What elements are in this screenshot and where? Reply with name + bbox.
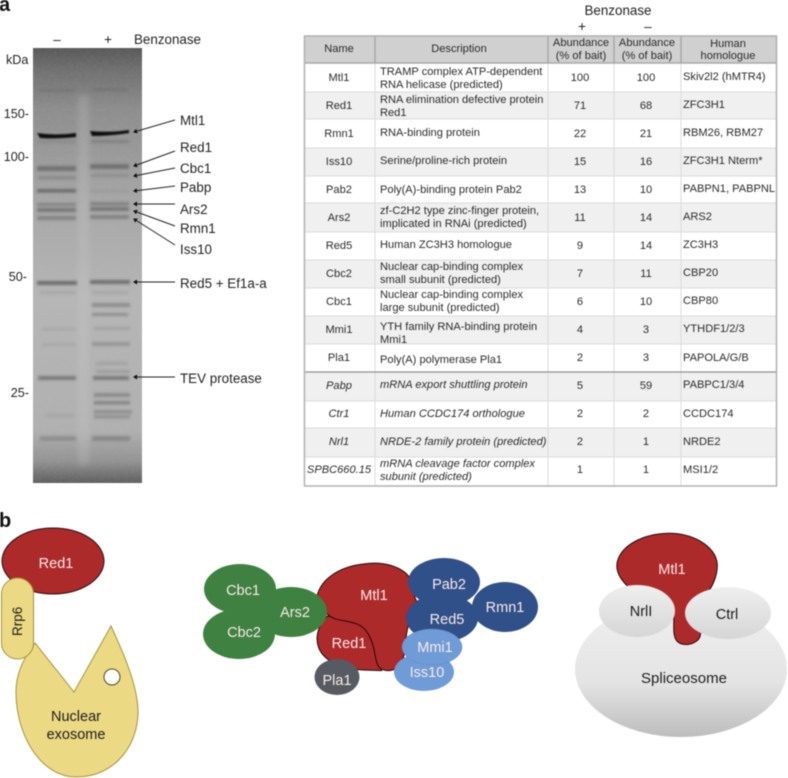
table super-header: + xyxy=(578,19,586,34)
table header row: (% of bait) xyxy=(556,50,606,62)
table body rows: Pab2 xyxy=(326,184,352,196)
table body rows: 22 xyxy=(574,128,586,140)
molecular weight markers xyxy=(4,53,29,400)
table body rows: Red5 xyxy=(326,240,352,252)
labels: NrlI xyxy=(630,604,652,620)
table body rows: PABPN1, PABPNL xyxy=(683,183,775,195)
Red1 subunit shape xyxy=(317,616,382,671)
subunit labels xyxy=(226,577,524,689)
band labels: Rmn1 xyxy=(180,221,216,236)
table body rows: 3 xyxy=(643,324,649,336)
table body rows: MSI1/2 xyxy=(683,464,718,476)
table body rows: SPBC660.15 xyxy=(307,464,372,476)
table body rows: RBM26, RBM27 xyxy=(683,127,763,139)
table body rows: Human ZC3H3 homologue xyxy=(380,239,512,251)
table body rows: Mmi1 xyxy=(380,334,407,346)
gel image xyxy=(33,48,142,483)
table body rows: YTH family RNA-binding protein xyxy=(380,321,537,333)
lane headers: + xyxy=(104,32,112,47)
panel: abundance table xyxy=(304,36,776,486)
table body rows: Pla1 xyxy=(328,352,350,364)
table body rows: 14 xyxy=(640,240,652,252)
table body rows: Ars2 xyxy=(328,212,350,224)
table body rows: 10 xyxy=(640,296,652,308)
subunit labels: Red1 xyxy=(332,636,366,652)
table body rows: Mtl1 xyxy=(329,72,349,84)
molecular weight markers: 150- xyxy=(4,107,29,121)
table body rows: 4 xyxy=(577,324,583,336)
lane headers: – xyxy=(53,32,61,47)
table body rows: mRNA export shuttling protein xyxy=(380,379,528,391)
table body rows: NRDE-2 family protein (predicted) xyxy=(380,436,547,448)
table body rows: 1 xyxy=(577,464,583,476)
subunit labels: Mmi1 xyxy=(417,640,453,656)
table body rows: CBP20 xyxy=(683,267,718,279)
band labels: Cbc1 xyxy=(180,161,211,176)
band labels: Ars2 xyxy=(180,202,208,217)
green subunits xyxy=(203,564,327,659)
table header row: (% of bait) xyxy=(622,50,672,62)
band arrows xyxy=(134,120,175,377)
table body rows: CBP80 xyxy=(683,295,718,307)
table body rows: CCDC174 xyxy=(683,408,734,420)
band labels: Iss10 xyxy=(180,242,212,257)
table super-header: Benzonase xyxy=(584,3,652,18)
band labels: Pabp xyxy=(180,180,211,195)
labels xyxy=(630,562,738,687)
table body rows: 9 xyxy=(577,240,583,252)
table header row: Name xyxy=(324,43,354,55)
spliceosome oval xyxy=(575,601,787,737)
table body rows: Cbc2 xyxy=(326,268,352,280)
band labels: Mtl1 xyxy=(180,113,205,128)
subunit labels: Rmn1 xyxy=(486,600,524,616)
subunit labels: Red5 xyxy=(430,612,464,628)
table header row: homologue xyxy=(701,50,755,62)
subunit labels: Cbc1 xyxy=(226,583,260,599)
table body rows: 3 xyxy=(643,352,649,364)
diagram: Mtl1 with spliceosome xyxy=(575,533,787,737)
table outer border xyxy=(304,36,776,486)
table body rows: 100 xyxy=(637,72,655,84)
table body rows: 1 xyxy=(643,464,649,476)
table super-header xyxy=(578,3,652,34)
table body rows: 1 xyxy=(643,436,649,448)
table body rows: Red1 xyxy=(380,107,407,119)
table body rows: 68 xyxy=(640,100,652,112)
table body rows: Rmn1 xyxy=(324,128,354,140)
table body rows: 5 xyxy=(577,380,583,392)
diagram: Red1 and nuclear exosome xyxy=(2,528,138,777)
labels: Ctrl xyxy=(716,607,738,623)
subunit labels: Mtl1 xyxy=(360,588,388,604)
diagram: MTREC complex xyxy=(203,558,538,695)
Red1 label: Red1 xyxy=(39,556,73,572)
table body rows: Cbc1 xyxy=(326,296,352,308)
table header row: Human xyxy=(710,38,746,50)
table body rows: Red1 xyxy=(326,100,352,112)
labels: Spliceosome xyxy=(641,670,727,687)
table body rows: Nrl1 xyxy=(329,436,349,448)
table body rows: 59 xyxy=(640,380,652,392)
table body rows: mRNA cleavage factor complex xyxy=(380,458,535,470)
table header row: Abundance xyxy=(619,37,675,49)
table body rows: 2 xyxy=(577,436,583,448)
band labels xyxy=(180,113,267,386)
Mtl1 subunit shape xyxy=(317,563,417,671)
table body rows: RNA-binding protein xyxy=(380,127,480,139)
Red1 oval xyxy=(2,528,104,594)
table body rows: Pabp xyxy=(326,380,352,392)
table body rows: NRDE2 xyxy=(683,436,721,448)
table body rows: subunit (predicted) xyxy=(380,471,472,483)
table header row: Description xyxy=(431,43,487,55)
molecular weight markers: 100- xyxy=(4,150,29,164)
Nrl1 oval xyxy=(599,585,675,637)
table body rows: YTHDF1/2/3 xyxy=(683,323,745,335)
table body rows: 100 xyxy=(571,72,589,84)
panel: gel with annotations xyxy=(4,32,267,483)
labels: Mtl1 xyxy=(658,562,686,578)
subunit labels: Ars2 xyxy=(280,605,310,621)
Ctr1 oval xyxy=(685,587,771,639)
nuclear exosome shape xyxy=(16,626,138,777)
table body rows: Iss10 xyxy=(326,156,352,168)
table body rows: RNA elimination defective protein xyxy=(380,94,543,106)
table background and grid xyxy=(304,36,776,486)
table body rows: 6 xyxy=(577,296,583,308)
table body rows: zf-C2H2 type zinc-finger protein, xyxy=(380,205,539,217)
molecular weight markers: 25- xyxy=(11,386,29,400)
subunit labels: Pab2 xyxy=(432,577,466,593)
table body rows: Ctr1 xyxy=(329,408,349,420)
band labels: Red1 xyxy=(180,140,212,155)
Rrp6 label: Rrp6 xyxy=(10,607,25,636)
active site hole xyxy=(104,669,120,685)
table header row: Abundance xyxy=(553,37,609,49)
subunit labels: Iss10 xyxy=(410,665,444,681)
exosome label: exosome xyxy=(47,727,105,743)
table body rows: 16 xyxy=(640,156,652,168)
table body rows: 15 xyxy=(574,156,586,168)
table body rows: large subunit (predicted) xyxy=(380,302,500,314)
table body rows: 10 xyxy=(640,184,652,196)
molecular weight markers: kDa xyxy=(6,53,28,67)
exosome label: Nuclear xyxy=(51,709,101,725)
table super-header: – xyxy=(644,19,652,34)
table body rows: 13 xyxy=(574,184,586,196)
table body rows: Nuclear cap-binding complex xyxy=(380,261,524,273)
table body rows: 2 xyxy=(577,408,583,420)
table body rows: PABPC1/3/4 xyxy=(683,379,744,391)
lane headers: Benzonase xyxy=(134,32,201,47)
table body rows: Mmi1 xyxy=(325,324,353,336)
table body rows: Poly(A)-binding protein Pab2 xyxy=(380,184,522,196)
table body rows: implicated in RNAi (predicted) xyxy=(380,218,527,230)
table body rows: Serine/proline-rich protein xyxy=(380,155,507,167)
blue subunits xyxy=(406,558,538,642)
table body rows: Nuclear cap-binding complex xyxy=(380,289,524,301)
table header row xyxy=(324,37,755,62)
table body rows: 11 xyxy=(640,268,652,280)
subunit labels: Cbc2 xyxy=(227,625,261,641)
table body rows: Human CCDC174 orthologue xyxy=(380,408,525,420)
table body rows: PAPOLA/G/B xyxy=(683,352,749,364)
table body rows: ZC3H3 xyxy=(683,239,718,251)
table body rows: Skiv2l2 (hMTR4) xyxy=(683,71,766,83)
table body rows: ZFC3H1 xyxy=(683,99,725,111)
table body rows: 2 xyxy=(643,408,649,420)
table body rows: 7 xyxy=(577,268,583,280)
band labels: TEV protease xyxy=(180,371,262,386)
table body rows: RNA helicase (predicted) xyxy=(380,79,503,91)
table body rows: 2 xyxy=(577,352,583,364)
molecular weight markers: 50- xyxy=(9,270,27,284)
Mtl1 shape xyxy=(617,533,717,645)
Rrp6 capsule xyxy=(2,578,34,659)
table body rows: 14 xyxy=(640,212,652,224)
table body rows: 11 xyxy=(574,212,586,224)
table body rows: ZFC3H1 Nterm* xyxy=(683,155,763,167)
table body rows: TRAMP complex ATP-dependent xyxy=(380,66,542,78)
lane headers xyxy=(53,32,201,47)
table body rows xyxy=(307,66,775,483)
table body rows: ARS2 xyxy=(683,211,712,223)
light blue subunits xyxy=(394,629,462,691)
table body rows: Poly(A) polymerase Pla1 xyxy=(380,354,502,366)
subunit labels: Pla1 xyxy=(322,673,352,689)
table body rows: small subunit (predicted) xyxy=(380,274,501,286)
Pla1 oval xyxy=(314,659,360,695)
table body rows: 21 xyxy=(640,128,652,140)
table body rows: 71 xyxy=(574,100,586,112)
band labels: Red5 + Ef1a-a xyxy=(180,276,267,291)
